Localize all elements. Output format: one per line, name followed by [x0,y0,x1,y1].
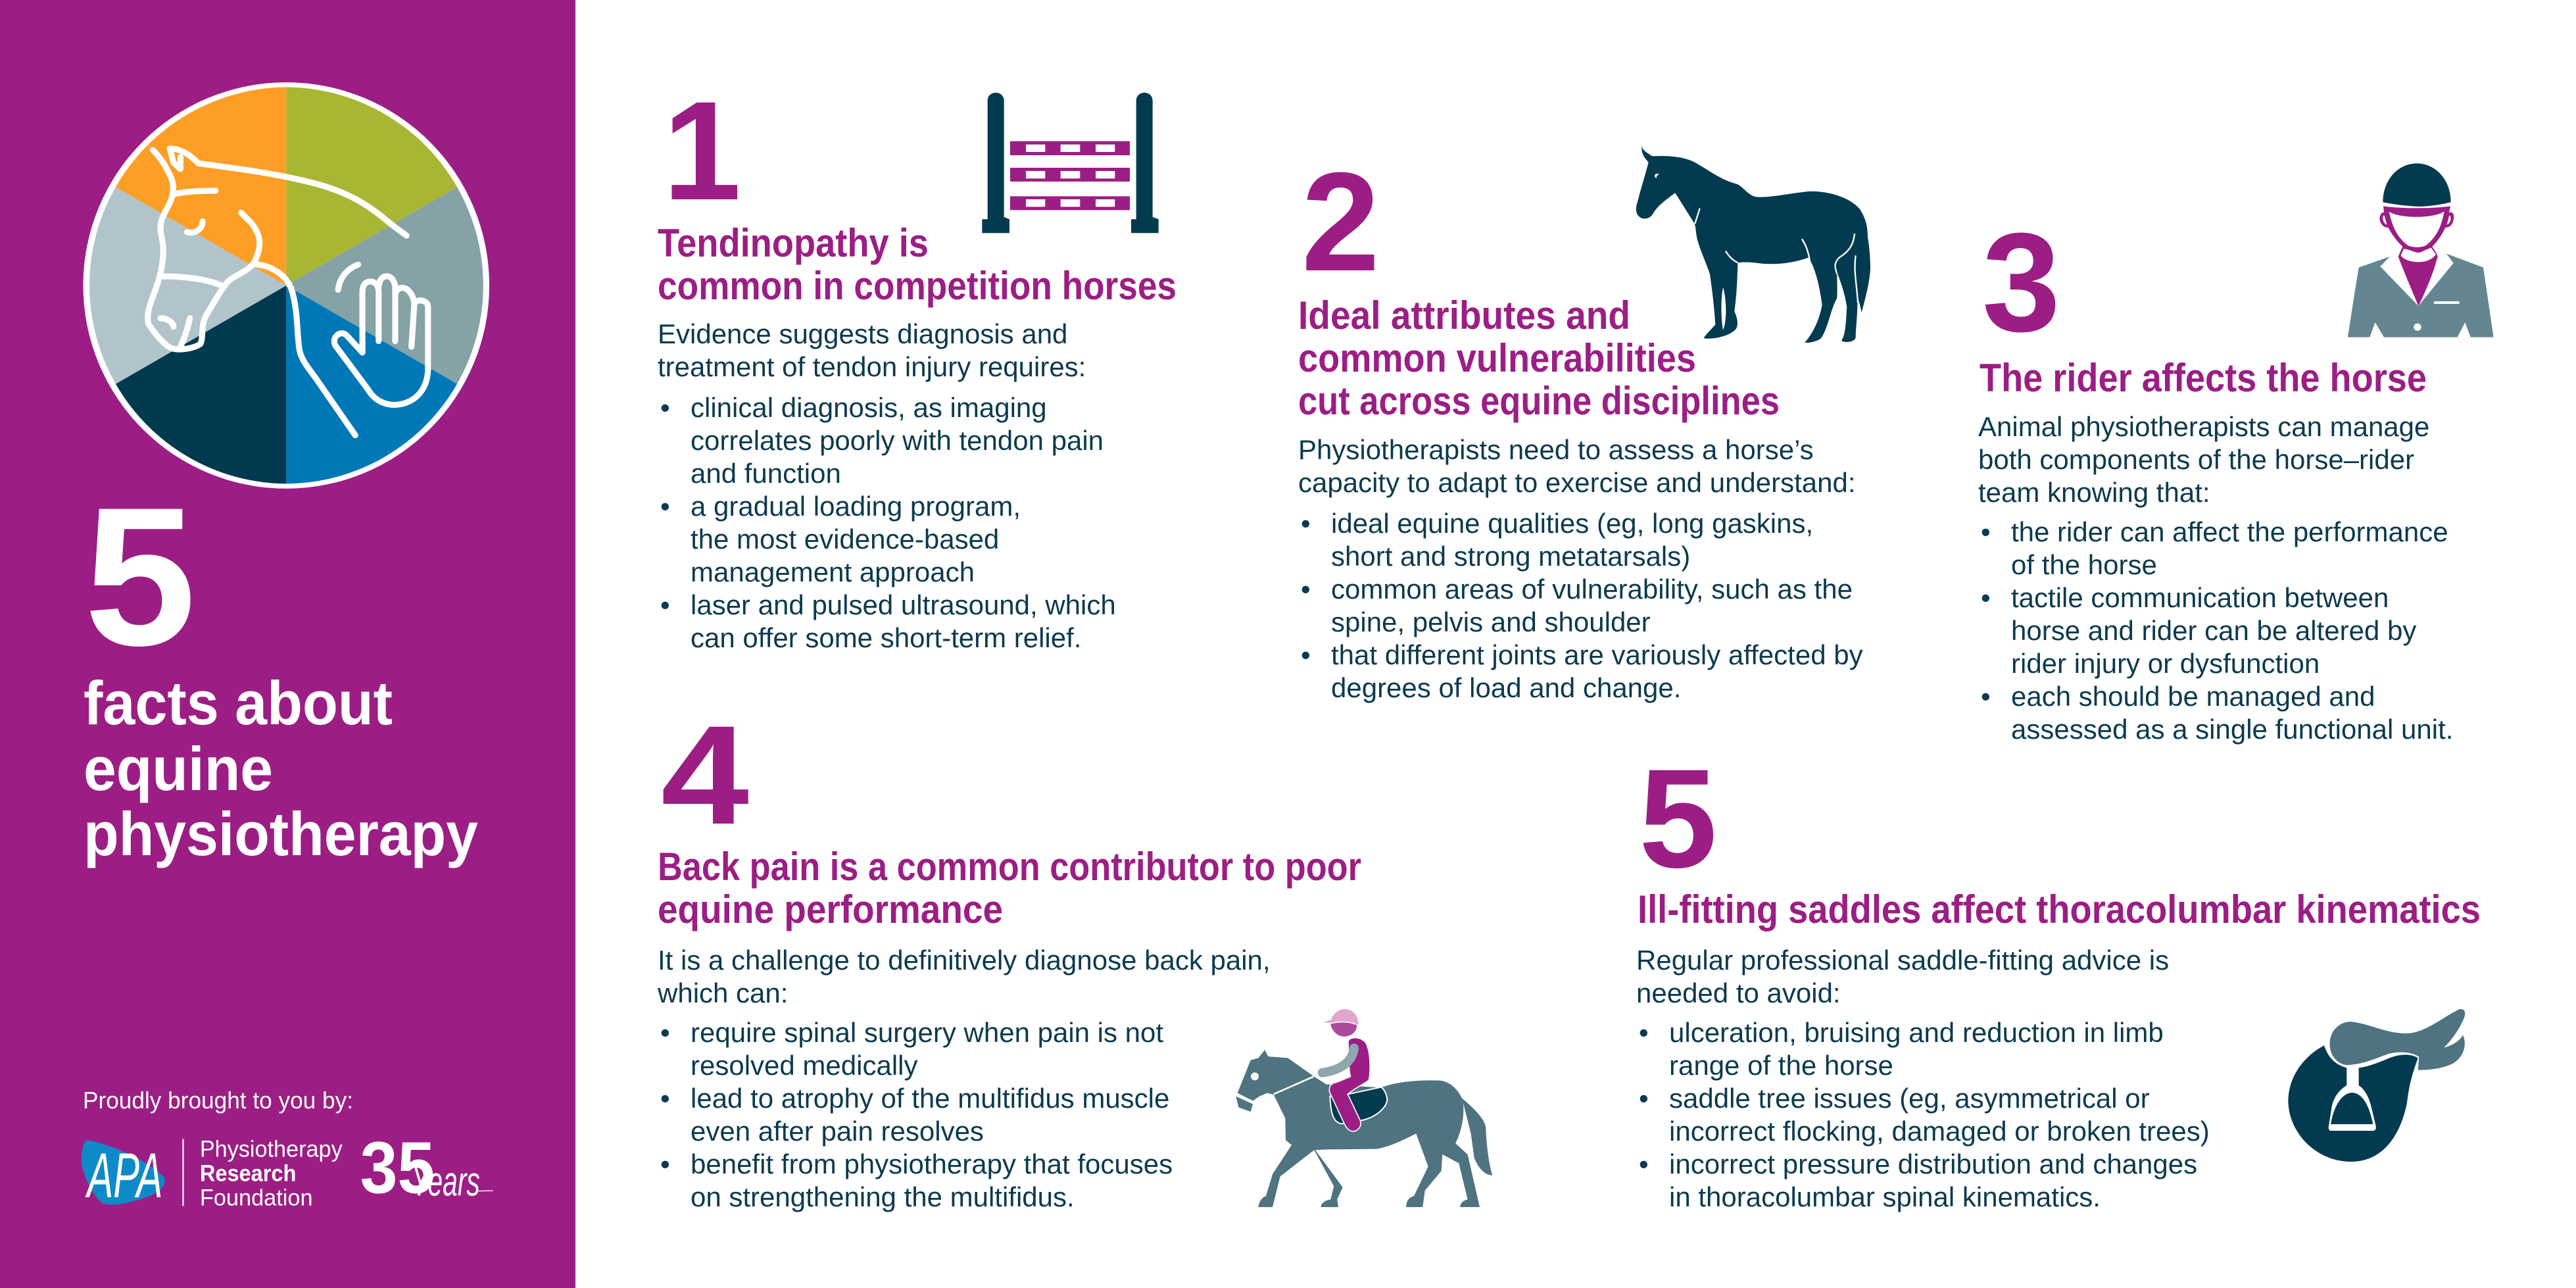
body text: • [660,1149,670,1179]
heading: Back pain is a common contributor to poor [658,845,1361,889]
body text: spine, pelvis and shoulder [1331,607,1651,637]
heading: Ill-fitting saddles affect thoracolumbar kinematics [1638,887,2481,931]
body text: ideal equine qualities (eg, long gaskins, [1331,508,1813,539]
panel: fact 1 [658,72,1177,653]
panel: fact 2 [1298,143,1870,703]
logos: APA, Physiotherapy Research Foundation, 35 years: Years [412,1158,480,1204]
logos: APA, Physiotherapy Research Foundation, 35 years [82,1127,493,1211]
body text: on strengthening the multifidus. [691,1181,1075,1212]
body text: lead to atrophy of the multifidus muscle [691,1083,1169,1114]
heading: common vulnerabilities [1298,336,1696,380]
body text [1298,434,1863,703]
icon: standing horse [1636,146,1870,343]
heading: Tendinopathy is [658,221,929,265]
body text: saddle tree issues (eg, asymmetrical or [1669,1083,2150,1114]
sponsor credit line: Proudly brought to you by: [83,1087,353,1114]
heading: The rider affects the horse [1980,356,2427,400]
body text: needed to avoid: [1636,978,1841,1008]
panel: fact 4 [657,697,1492,1212]
body text: range of the horse [1669,1050,1893,1081]
body text: capacity to adapt to exercise and understand: [1298,467,1856,498]
heading: Ideal attributes and [1298,293,1630,337]
body text: • [660,1017,670,1048]
body text: that different joints are variously affected by [1331,639,1863,670]
body text: each should be managed and [2011,681,2375,712]
body text: incorrect pressure distribution and changes [1669,1149,2197,1179]
body text: • [1981,516,1991,547]
heading [658,221,1177,308]
heading: equine performance [658,887,1003,931]
sidebar title: equine [84,734,273,803]
body text: • [1301,639,1311,670]
body text: even after pain resolves [691,1116,984,1147]
body text: management approach [691,557,975,587]
logos: APA, Physiotherapy Research Foundation, 35 years: 35 [360,1127,435,1208]
body text: • [660,1083,670,1114]
body text: degrees of load and change. [1331,672,1681,703]
body text: incorrect flocking, damaged or broken trees) [1669,1116,2210,1147]
body text: resolved medically [691,1050,917,1081]
panel: purple sidebar [0,0,575,1288]
heading [658,845,1361,931]
icon: horse with rider [1236,1009,1492,1207]
body text: Regular professional saddle-fitting advice is [1636,945,2169,976]
body text: • [1639,1149,1649,1179]
panel: fact 3 [1978,163,2494,745]
body text: which can: [657,978,788,1008]
body text: It is a challenge to definitively diagnose back pain, [658,945,1271,976]
body text: Physiotherapists need to assess a horse’s [1298,434,1814,465]
body text: the most evidence-based [691,524,999,555]
body text: Animal physiotherapists can manage [1978,411,2429,442]
body text: short and strong metatarsals) [1331,541,1690,572]
body text [1978,411,2453,745]
body text: • [660,589,670,620]
heading: cut across equine disciplines [1298,379,1780,423]
sidebar title [84,668,478,868]
heading: common in competition horses [658,264,1177,308]
logos: APA, Physiotherapy Research Foundation, 35 years: Research [200,1160,296,1186]
sidebar title: facts about [84,668,393,737]
body text: require spinal surgery when pain is not [691,1017,1163,1048]
body text: treatment of tendon injury requires: [658,351,1086,382]
body text: horse and rider can be altered by [2011,615,2416,646]
body text: correlates poorly with tendon pain [691,425,1104,456]
icon: horse and hand pie badge [83,82,489,489]
big number five: 5 [84,466,196,687]
body text: in thoracolumbar spinal kinematics. [1669,1181,2101,1212]
body text [657,945,1271,1212]
body text: Evidence suggests diagnosis and [658,318,1067,349]
body text: common areas of vulnerability, such as the [1331,574,1853,605]
logos: APA, Physiotherapy Research Foundation, 35 years: APA [85,1139,162,1211]
body text: • [1639,1017,1649,1048]
panel: fact 5 [1636,740,2481,1212]
number 4: 4 [661,697,749,854]
sidebar title: physiotherapy [84,799,478,868]
body text: rider injury or dysfunction [2011,648,2320,679]
body text: • [1981,582,1991,613]
body text: • [1301,574,1311,605]
logos: APA, Physiotherapy Research Foundation, 35 years: Physiotherapy [200,1135,343,1162]
logos: APA, Physiotherapy Research Foundation, 35 years: Foundation [200,1184,313,1210]
body text: can offer some short-term relief. [691,622,1081,653]
body text: • [1301,508,1311,539]
body text: tactile communication between [2011,582,2389,613]
body text: laser and pulsed ultrasound, which [691,589,1116,620]
number 5: 5 [1639,740,1717,897]
icon: rider bust [2348,163,2494,337]
body text: both components of the horse–rider [1978,444,2414,475]
body text: a gradual loading program, [691,491,1021,522]
number 2: 2 [1301,143,1380,301]
body text: benefit from physiotherapy that focuses [691,1149,1173,1179]
body text: • [660,392,670,423]
body text: • [1981,681,1991,712]
icon: saddle [2288,1009,2465,1162]
icon: show jump [982,93,1159,233]
body text: assessed as a single functional unit. [2011,714,2453,745]
body text: • [660,491,670,522]
heading [1298,293,1780,423]
number 1: 1 [663,72,741,230]
body text: the rider can affect the performance [2011,516,2448,547]
body text: • [1639,1083,1649,1114]
body text [658,318,1116,653]
body text: of the horse [2011,549,2157,580]
body text [1636,945,2210,1212]
body text: and function [691,458,841,489]
body text: team knowing that: [1978,477,2210,508]
number 3: 3 [1982,204,2060,361]
body text: ulceration, bruising and reduction in limb [1669,1017,2164,1048]
body text: clinical diagnosis, as imaging [691,392,1047,423]
